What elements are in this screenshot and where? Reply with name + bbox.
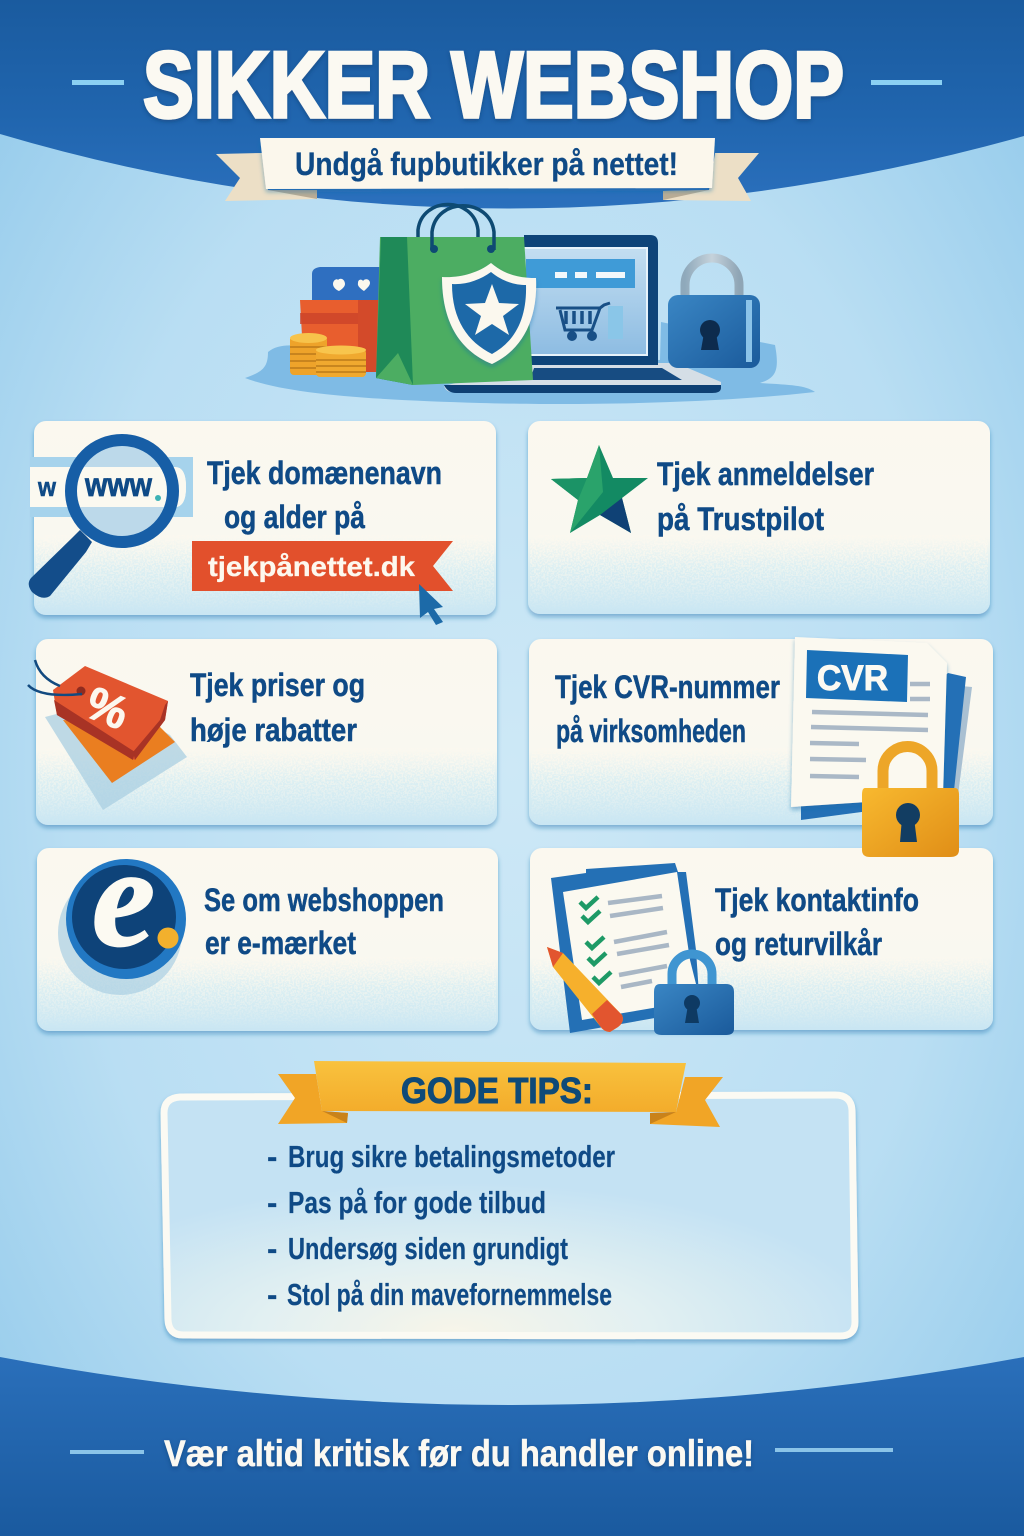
footer line right: [775, 1448, 893, 1452]
icon: price tags: [28, 660, 187, 810]
tip 4: Stol på din mavefornemmelse: [287, 1277, 612, 1312]
footer message: Vær altid kritisk før du handler online!: [164, 1433, 754, 1474]
tip 1: -: [267, 1139, 277, 1174]
panel: contact info: [530, 848, 993, 1035]
tip 2: -: [267, 1185, 277, 1220]
title accent line right: [871, 80, 942, 85]
tip 2: Pas på for gode tilbud: [288, 1185, 546, 1220]
percent sign: %: [79, 676, 136, 740]
text: domain line: Tjek domænenavn: [207, 455, 442, 491]
icon: pencil: [547, 947, 623, 1032]
panel: check domain name: [29, 421, 496, 625]
blue card: [312, 267, 382, 304]
icon: cursor: [419, 584, 443, 625]
text: prices line: Tjek priser og: [190, 667, 365, 703]
panel: e-mark: [37, 818, 498, 1031]
laptop: [444, 235, 721, 393]
text: contact line: Tjek kontaktinfo: [715, 882, 919, 918]
ground shadow: [245, 322, 815, 404]
text: trustpilot line: på Trustpilot: [657, 501, 824, 537]
gold ribbon heading: [278, 1061, 723, 1127]
text: returns line: og returvilkår: [715, 926, 882, 962]
icon: star: [551, 445, 648, 533]
panel: CVR number: [529, 637, 993, 857]
icon: CVR document: CVR: [817, 659, 888, 698]
footer band: [0, 1357, 1024, 1536]
text: cvr line: Tjek CVR-nummer: [555, 669, 780, 705]
text: e-mark line 2: er e-mærket: [205, 925, 356, 961]
panel: good tips: [164, 1061, 855, 1336]
icon: e-mark badge: [58, 818, 186, 995]
subtitle text: Undgå fupbutikker på nettet!: [295, 146, 678, 182]
gold coins: [290, 333, 366, 377]
text: reviews line: Tjek anmeldelser: [657, 456, 874, 492]
padlock: [668, 258, 760, 368]
icon: checklist: [551, 863, 700, 1033]
text: company line: på virksomheden: [556, 713, 746, 749]
tips heading: GODE TIPS:: [401, 1070, 593, 1111]
footer line left: [70, 1450, 144, 1454]
title: SIKKER WEBSHOP: [143, 32, 844, 137]
icon: CVR document: [791, 637, 972, 820]
icon: magnifier over www: [29, 440, 193, 598]
shopping bag: [376, 204, 536, 385]
red link ribbon: tjekpånettet.dk: [208, 551, 415, 582]
red gift box: [300, 300, 382, 372]
icon: magnifier over www: w: [37, 472, 57, 502]
title accent line left: [72, 80, 124, 85]
panel: Trustpilot: [528, 421, 990, 614]
tips list: [267, 1139, 615, 1312]
text: age line: og alder på: [224, 499, 365, 535]
subtitle ribbon: [216, 138, 759, 201]
text: discounts line: høje rabatter: [190, 712, 357, 748]
icon: gold padlock: [862, 746, 959, 857]
icon: magnifier over www: www: [84, 466, 152, 503]
tip 3: -: [267, 1231, 277, 1266]
icon: e-mark badge: e: [92, 818, 155, 976]
cart icon: [556, 303, 610, 340]
tip 4: -: [267, 1277, 277, 1312]
header band: [0, 0, 1024, 209]
tip 1: Brug sikre betalingsmetoder: [288, 1139, 615, 1174]
text: e-mark line 1: Se om webshoppen: [204, 882, 444, 918]
tip 3: Undersøg siden grundigt: [288, 1231, 568, 1266]
shield badge: [442, 263, 536, 364]
hero illustration: shop, laptop, lock: [245, 204, 815, 404]
icon: blue padlock: [654, 954, 734, 1035]
red link ribbon: [192, 541, 453, 591]
panel: prices and discounts: [28, 639, 497, 825]
